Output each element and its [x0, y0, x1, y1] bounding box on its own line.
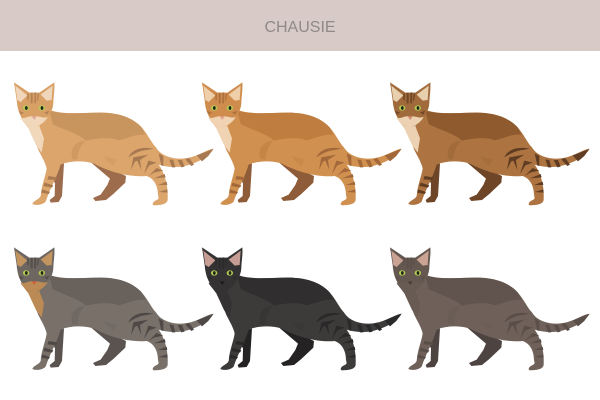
cat: grey with tan chest: [14, 247, 214, 370]
cat: ginger: [202, 82, 402, 205]
cat: brown tabby: [390, 82, 590, 205]
title banner: [0, 0, 600, 51]
cat: black: [202, 247, 402, 370]
cat: brown grey: [390, 247, 590, 370]
cat: light ginger tabby: [14, 82, 214, 205]
title: CHAUSIE: [264, 19, 336, 36]
